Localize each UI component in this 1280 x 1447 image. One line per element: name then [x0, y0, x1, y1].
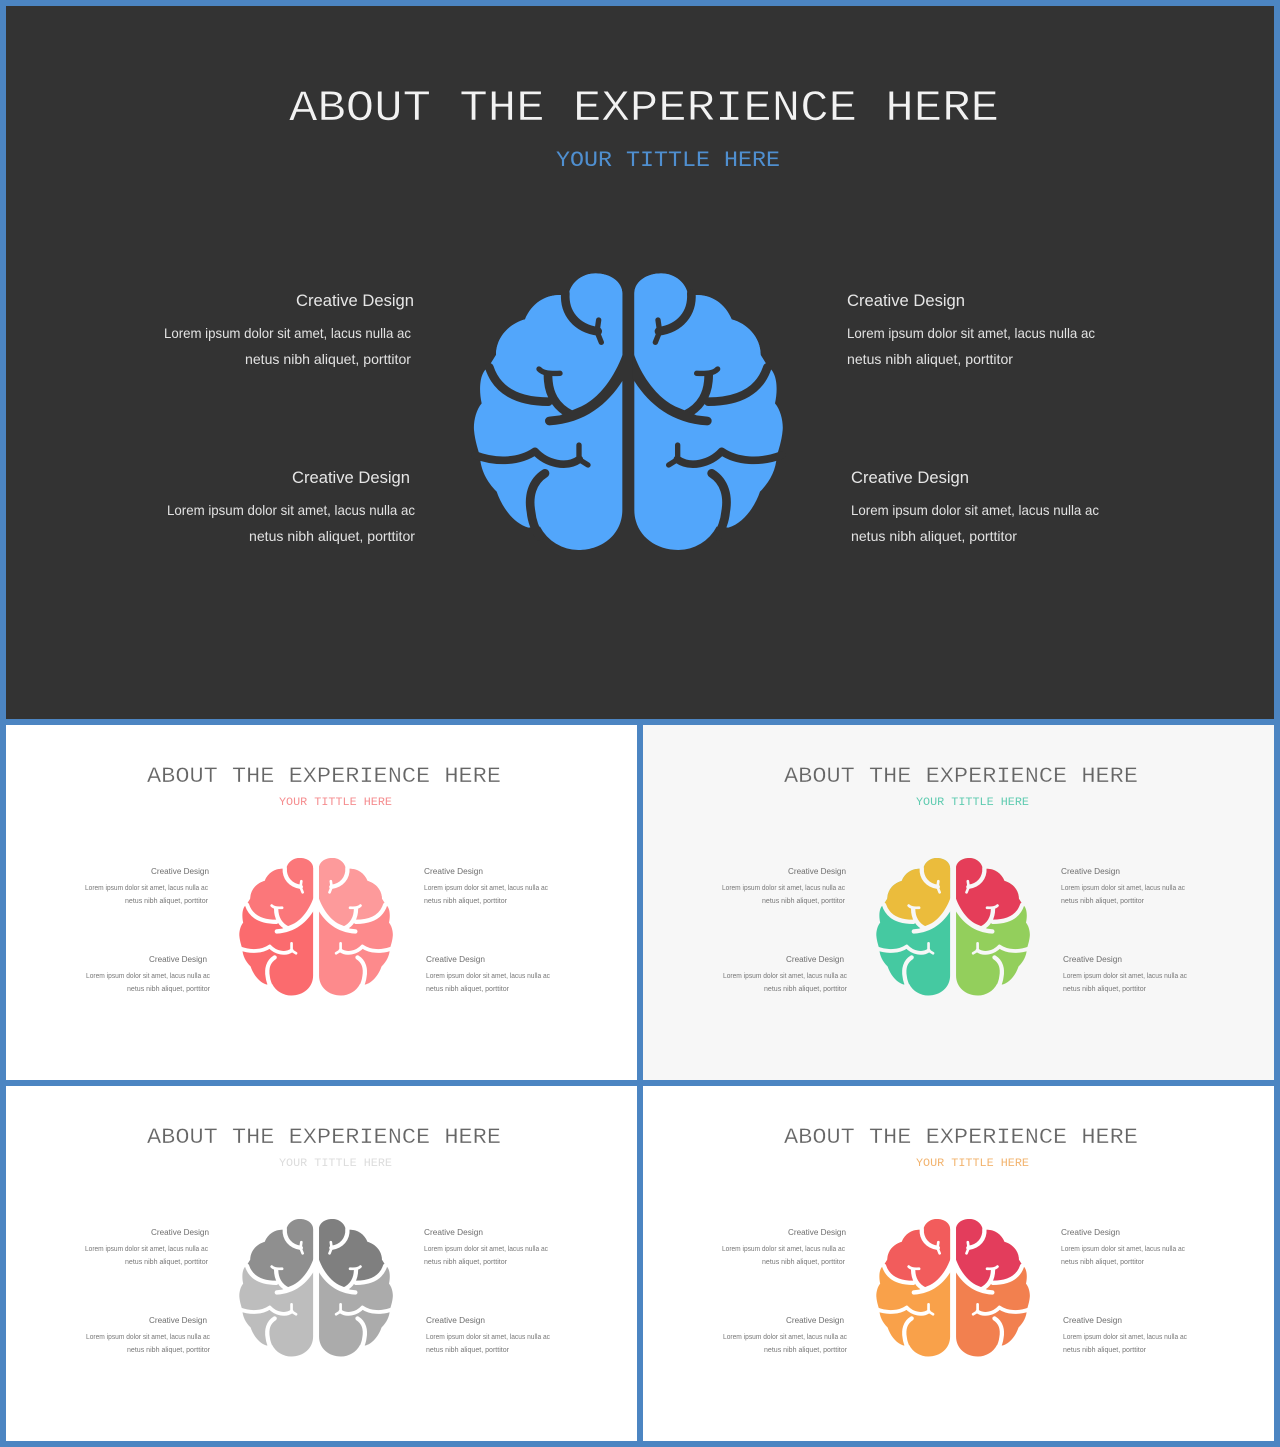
icon: grey brain	[239, 1219, 393, 1357]
panel background	[6, 1086, 637, 1441]
title: ABOUT THE EXPERIENCE HERE	[784, 1125, 1138, 1150]
text block: top right: Creative Design	[847, 291, 965, 310]
subtitle: YOUR TITTLE HERE	[916, 1158, 1029, 1170]
text block: top right: netus nibh aliquet, porttitor	[1061, 1259, 1145, 1266]
text block: bottom right: Lorem ipsum dolor sit amet, lacus nulla ac	[1063, 1334, 1187, 1341]
text block: top right	[847, 291, 1095, 367]
text block: top right	[1061, 1227, 1185, 1266]
text block: top left: Lorem ipsum dolor sit amet, lacus nulla ac	[722, 1246, 845, 1253]
text block: top left	[722, 1227, 846, 1266]
text block: top left: Creative Design	[296, 291, 414, 310]
subtitle: YOUR TITTLE HERE	[916, 797, 1029, 809]
text block: top right	[424, 866, 548, 905]
text block: bottom right: Creative Design	[1063, 954, 1122, 964]
text block: bottom right: Lorem ipsum dolor sit amet, lacus nulla ac	[1063, 973, 1187, 980]
subtitle: YOUR TITTLE HERE	[279, 1158, 392, 1170]
panel: main dark slide	[6, 6, 1274, 719]
text block: top left: Lorem ipsum dolor sit amet, lacus nulla ac	[85, 885, 208, 892]
text block: bottom left: Creative Design	[149, 1315, 207, 1325]
text block: top left: netus nibh aliquet, porttitor	[762, 1259, 846, 1266]
text block: top right: Creative Design	[424, 866, 483, 876]
text block: top left	[85, 866, 209, 905]
text block: bottom left: Creative Design	[786, 954, 844, 964]
text block: bottom left	[723, 1315, 848, 1354]
text block: bottom right: netus nibh aliquet, porttitor	[426, 1347, 510, 1354]
subtitle: YOUR TITTLE HERE	[279, 797, 392, 809]
panel: grey slide	[6, 1086, 637, 1441]
text block: top right: Lorem ipsum dolor sit amet, lacus nulla ac	[424, 885, 548, 892]
panel: pink slide	[6, 725, 637, 1080]
text block: bottom right: netus nibh aliquet, porttitor	[851, 528, 1017, 544]
text block: bottom left: netus nibh aliquet, porttitor	[764, 1347, 848, 1354]
text block: bottom left: Lorem ipsum dolor sit amet, lacus nulla ac	[723, 1334, 847, 1341]
text block: top left: netus nibh aliquet, porttitor	[762, 898, 846, 905]
panel: multicolour slide	[643, 725, 1274, 1080]
text block: bottom left	[723, 954, 848, 993]
text block: top right: Lorem ipsum dolor sit amet, lacus nulla ac	[1061, 885, 1185, 892]
text block: top left: Lorem ipsum dolor sit amet, lacus nulla ac	[164, 325, 411, 341]
text block: bottom right: netus nibh aliquet, porttitor	[426, 986, 510, 993]
text block: bottom left: Lorem ipsum dolor sit amet, lacus nulla ac	[723, 973, 847, 980]
text block: top left: Lorem ipsum dolor sit amet, lacus nulla ac	[722, 885, 845, 892]
text block: bottom right: Creative Design	[426, 954, 485, 964]
text block: bottom left: Creative Design	[292, 468, 410, 487]
title: ABOUT THE EXPERIENCE HERE	[289, 84, 999, 134]
text block: top right: netus nibh aliquet, porttitor	[424, 898, 508, 905]
panel: warm slide	[643, 1086, 1274, 1441]
text block: top left: netus nibh aliquet, porttitor	[245, 351, 411, 367]
text block: bottom left: netus nibh aliquet, porttitor	[127, 1347, 211, 1354]
subtitle: YOUR TITTLE HERE	[556, 148, 780, 173]
text block: top left: Lorem ipsum dolor sit amet, lacus nulla ac	[85, 1246, 208, 1253]
text block: top left	[85, 1227, 209, 1266]
text block: bottom right: Creative Design	[1063, 1315, 1122, 1325]
text block: top left: netus nibh aliquet, porttitor	[125, 898, 209, 905]
icon: multicolour brain	[876, 858, 1030, 996]
panel background	[6, 6, 1274, 719]
text block: bottom left: Lorem ipsum dolor sit amet, lacus nulla ac	[86, 1334, 210, 1341]
text block: bottom left: netus nibh aliquet, porttitor	[249, 528, 415, 544]
text block: bottom left: netus nibh aliquet, porttitor	[764, 986, 848, 993]
text block: top right	[1061, 866, 1185, 905]
text block: bottom right	[1063, 954, 1187, 993]
panel background	[643, 725, 1274, 1080]
text block: bottom left: Creative Design	[786, 1315, 844, 1325]
panel background	[643, 1086, 1274, 1441]
text block: top left: Creative Design	[788, 1227, 846, 1237]
title: ABOUT THE EXPERIENCE HERE	[147, 764, 501, 789]
text block: top left	[164, 291, 414, 367]
text block: bottom right: Lorem ipsum dolor sit amet, lacus nulla ac	[851, 502, 1099, 518]
text block: bottom right: netus nibh aliquet, porttitor	[1063, 1347, 1147, 1354]
text block: top right: Lorem ipsum dolor sit amet, lacus nulla ac	[1061, 1246, 1185, 1253]
text block: bottom left	[86, 1315, 211, 1354]
text block: top right: Creative Design	[424, 1227, 483, 1237]
text block: bottom right	[426, 954, 550, 993]
text block: bottom left: Creative Design	[149, 954, 207, 964]
icon: pink brain	[239, 858, 393, 996]
text block: top right: netus nibh aliquet, porttitor	[424, 1259, 508, 1266]
text block: top right: Lorem ipsum dolor sit amet, lacus nulla ac	[424, 1246, 548, 1253]
icon: warm brain	[876, 1219, 1030, 1357]
icon: blue brain	[474, 273, 783, 550]
text block: top right	[424, 1227, 548, 1266]
text block: bottom left	[167, 468, 415, 544]
text block: bottom left: Lorem ipsum dolor sit amet, lacus nulla ac	[86, 973, 210, 980]
text block: top right: netus nibh aliquet, porttitor	[847, 351, 1013, 367]
text block: top right: netus nibh aliquet, porttitor	[1061, 898, 1145, 905]
text block: top left	[722, 866, 846, 905]
text block: bottom right: netus nibh aliquet, porttitor	[1063, 986, 1147, 993]
text block: top left: Creative Design	[151, 1227, 209, 1237]
text block: top left: netus nibh aliquet, porttitor	[125, 1259, 209, 1266]
text block: top right: Lorem ipsum dolor sit amet, lacus nulla ac	[847, 325, 1095, 341]
text block: bottom right: Lorem ipsum dolor sit amet, lacus nulla ac	[426, 1334, 550, 1341]
title: ABOUT THE EXPERIENCE HERE	[147, 1125, 501, 1150]
text block: top right: Creative Design	[1061, 866, 1120, 876]
text block: top right: Creative Design	[1061, 1227, 1120, 1237]
text block: bottom left: netus nibh aliquet, porttitor	[127, 986, 211, 993]
panel background	[6, 725, 637, 1080]
text block: bottom right: Creative Design	[426, 1315, 485, 1325]
text block: bottom right	[426, 1315, 550, 1354]
text block: bottom left: Lorem ipsum dolor sit amet, lacus nulla ac	[167, 502, 415, 518]
text block: top left: Creative Design	[788, 866, 846, 876]
text block: bottom right	[1063, 1315, 1187, 1354]
text block: bottom right	[851, 468, 1099, 544]
text block: bottom right: Lorem ipsum dolor sit amet, lacus nulla ac	[426, 973, 550, 980]
text block: top left: Creative Design	[151, 866, 209, 876]
text block: bottom left	[86, 954, 211, 993]
text block: bottom right: Creative Design	[851, 468, 969, 487]
title: ABOUT THE EXPERIENCE HERE	[784, 764, 1138, 789]
